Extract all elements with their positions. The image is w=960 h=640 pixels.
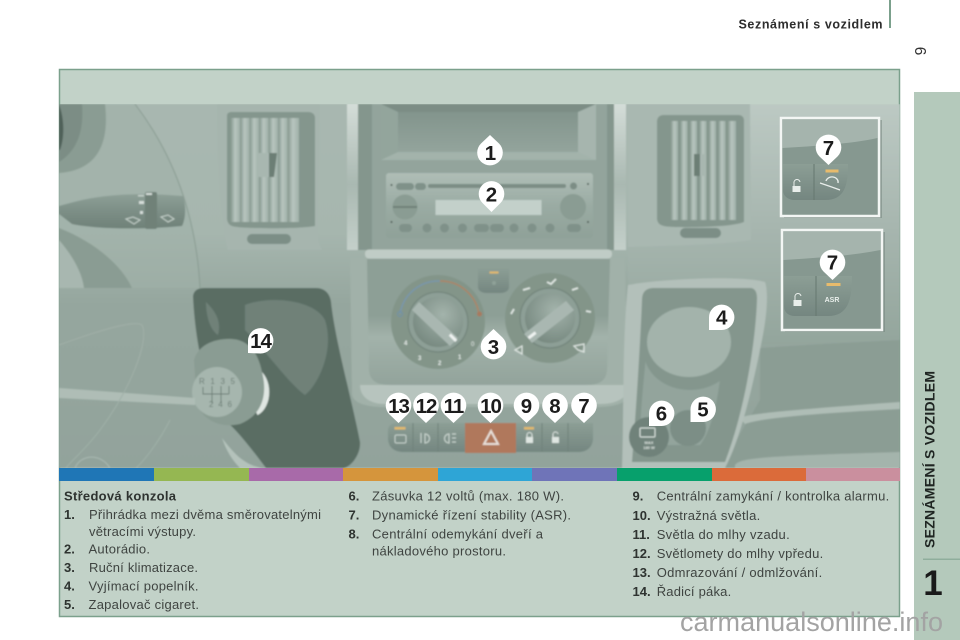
text column 2: Zásuvka 12 voltů (max. 180 W). — [372, 488, 564, 504]
marker 8 — [542, 393, 568, 423]
trim strip — [365, 250, 612, 258]
left knob: fan and temperature: 2 — [438, 361, 442, 367]
inset: ASR switch: ASR — [825, 297, 839, 304]
marker 3 — [481, 329, 506, 359]
marker 13 — [386, 393, 411, 423]
ashtray and socket recess: MAX — [645, 440, 654, 445]
storage compartment — [381, 104, 596, 160]
small switch — [478, 268, 509, 293]
marker 7: 7 — [578, 395, 590, 418]
marker 11: 11 — [444, 395, 464, 418]
text column 2: Dynamické řízení stability (ASR). — [372, 508, 571, 522]
colour band — [59, 468, 900, 481]
text column 3: 14. — [632, 584, 651, 599]
inset: ESP switch — [781, 118, 882, 218]
text column 3: Výstražná světla. — [657, 508, 760, 523]
text column 2: 7. — [348, 508, 359, 522]
marker 5: 5 — [697, 398, 709, 422]
text column 1: 2. — [64, 542, 75, 556]
marker 1: 1 — [485, 142, 496, 165]
marker 2: 2 — [486, 184, 497, 206]
lower right dashboard — [720, 340, 900, 468]
text column 3: Světla do mlhy vzadu. — [657, 527, 790, 542]
switch row — [388, 423, 593, 453]
main panel — [60, 70, 900, 616]
text column 1: větracími výstupy. — [89, 524, 196, 539]
markers — [248, 135, 845, 426]
marker 5 — [690, 397, 716, 422]
marker 13: 13 — [388, 395, 409, 418]
gear lever boot — [193, 288, 360, 468]
text column 3: Centrální zamykání / kontrolka alarmu. — [657, 488, 889, 504]
text column 3: 9. — [632, 488, 643, 504]
marker 7 — [571, 393, 597, 423]
car radio — [386, 172, 594, 232]
sidebar: chapter tab — [914, 92, 960, 640]
instrument cluster and steering column — [59, 104, 200, 288]
marker 4: 4 — [716, 306, 728, 330]
marker 7 on ESP inset — [816, 135, 841, 165]
watermark: carmanualsonline.info — [680, 607, 943, 637]
ashtray and socket recess: 180 W — [643, 445, 655, 450]
right knob: air distribution — [505, 273, 595, 363]
marker 12: 12 — [416, 395, 437, 418]
marker 9 — [514, 393, 539, 423]
left knob: fan and temperature: 3 — [418, 356, 422, 362]
marker 12 — [413, 393, 439, 423]
right air vent — [656, 104, 900, 238]
marker 4 — [709, 305, 734, 330]
text column 1 — [64, 488, 321, 612]
marker 2 — [479, 181, 504, 212]
marker 9: 9 — [521, 395, 532, 418]
header: chapter title: Seznámení s vozidlem — [738, 18, 882, 32]
text column 3: Řadicí páka. — [657, 584, 731, 599]
sidebar: chapter tab: SEZNÁMENÍ S VOZIDLEM — [922, 371, 938, 548]
text column 1: Vyjímací popelník. — [88, 578, 198, 594]
text column 3: 11. — [632, 527, 650, 542]
dashboard illustration — [59, 104, 900, 468]
marker 11 — [441, 393, 466, 423]
text column 1: 5. — [64, 597, 75, 612]
wiper stalk — [59, 192, 185, 229]
text column 3: 10. — [632, 508, 651, 523]
ashtray and socket recess — [622, 278, 767, 468]
left air vent — [226, 112, 316, 244]
marker 14: 14 — [250, 330, 272, 353]
text column 1: Zapalovač cigaret. — [88, 597, 199, 612]
left knob: fan and temperature: 4 — [404, 341, 408, 347]
gear knob: R135 — [199, 377, 236, 386]
text column 3: Odmrazování / odmlžování. — [657, 565, 822, 580]
text column 1: 1. — [64, 507, 75, 522]
text column 2: Centrální odemykání dveří a — [372, 526, 544, 542]
marker 10 — [478, 393, 503, 423]
centre console frame — [347, 104, 626, 250]
text column 3: 12. — [632, 546, 651, 561]
marker 7 on ASR inset — [820, 250, 845, 280]
marker 7 on ESP inset: 7 — [823, 137, 834, 160]
page number: 9 — [913, 47, 930, 55]
climate control panel — [350, 258, 628, 407]
text column 1: 3. — [64, 560, 75, 575]
marker 7 on ASR inset: 7 — [827, 252, 838, 274]
left knob: fan and temperature — [391, 275, 485, 369]
marker 6 — [649, 401, 674, 426]
marker 10: 10 — [480, 395, 501, 418]
text column 1: Ruční klimatizace. — [89, 560, 198, 575]
text column 1: 4. — [64, 578, 75, 594]
text column 3: Světlomety do mlhy vpředu. — [657, 546, 823, 561]
text column 2: 6. — [348, 488, 359, 504]
text column 3 — [632, 488, 889, 599]
text column 1: Autorádio. — [88, 542, 150, 556]
marker 6: 6 — [656, 402, 667, 426]
marker 1 — [477, 135, 503, 165]
text column 2: 8. — [348, 526, 359, 542]
inset: ASR switch — [782, 230, 885, 332]
text column 3: 13. — [632, 565, 651, 580]
marker 8: 8 — [549, 395, 561, 418]
marker 3: 3 — [488, 336, 499, 359]
gear knob — [192, 339, 266, 425]
text column 1: Přihrádka mezi dvěma směrovatelnými — [89, 507, 321, 522]
gear knob: 246 — [209, 400, 233, 409]
left knob: fan and temperature: 0 — [471, 342, 475, 348]
lower left dashboard — [59, 388, 195, 468]
text column 2 — [348, 488, 571, 558]
text column 1: Středová konzola — [64, 488, 177, 504]
text column 2: nákladového prostoru. — [372, 544, 506, 558]
left knob: fan and temperature: 1 — [458, 355, 462, 361]
sidebar: chapter tab: 1 — [923, 564, 943, 603]
